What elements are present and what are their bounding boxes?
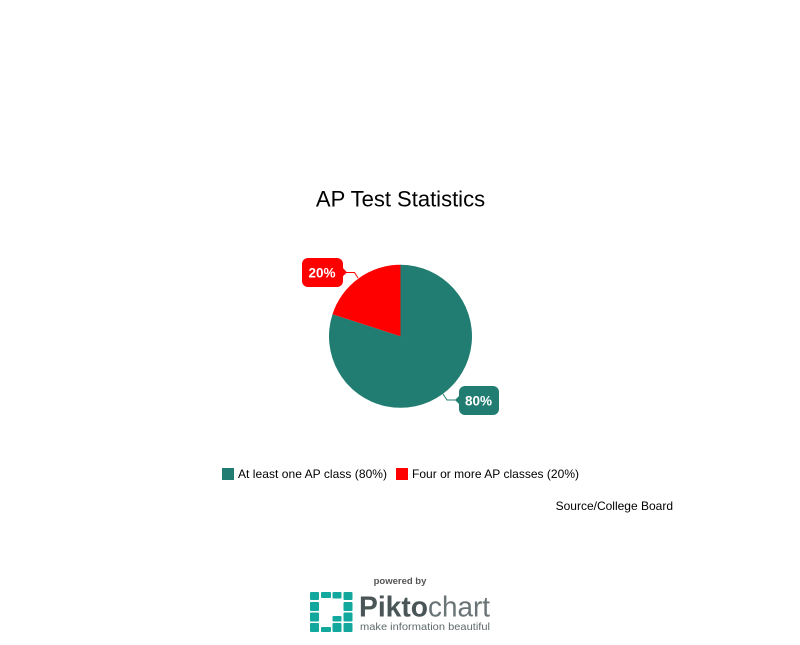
callout: 20% [302,258,358,287]
powered by text: powered by [374,576,427,587]
legend item: at least one AP class: At least one AP class (80%) [238,467,387,481]
pie slice: at least one AP class 80% [329,265,472,408]
callout: 80% [443,386,499,415]
piktochart logo [310,576,490,633]
callout: 80%: 80% [465,394,492,408]
callout: 20%: 20% [308,266,336,280]
legend item: four or more AP classes: Four or more AP classes (20%) [412,467,579,481]
source note: Source/College Board [556,499,673,513]
logo tagline: make information beautiful [360,621,490,633]
legend [222,467,579,481]
pie slice: four or more AP classes 20% [332,265,400,336]
pie chart [302,258,499,415]
icon: piktochart squares [310,592,352,632]
title: AP Test Statistics [316,186,485,212]
logo wordmark: Piktochart [359,592,490,624]
